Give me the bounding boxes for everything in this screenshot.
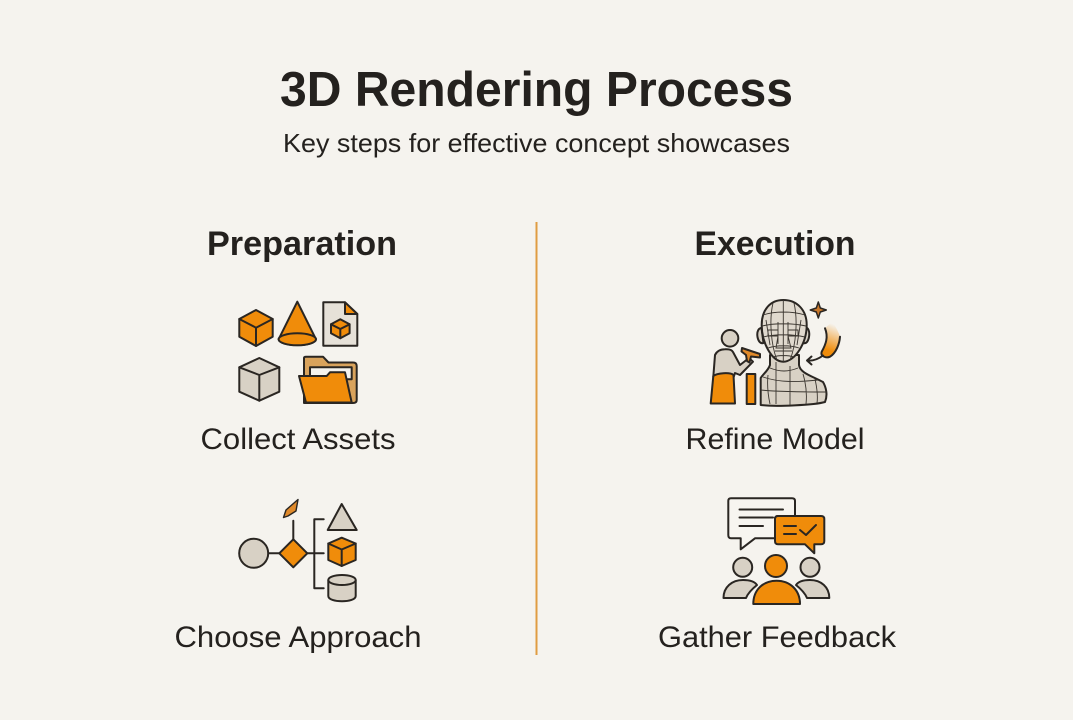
label: Collect Assets: Collect Assets bbox=[200, 423, 396, 456]
center person bbox=[753, 555, 800, 604]
subtitle: Key steps for effective concept showcases bbox=[283, 128, 790, 158]
sparkle bbox=[810, 302, 826, 318]
gray triangle bbox=[328, 504, 357, 530]
orange flame with arrow bbox=[807, 321, 840, 364]
file with cube bbox=[323, 302, 357, 346]
heading: Preparation: Preparation bbox=[207, 225, 397, 263]
orange cone bbox=[279, 302, 316, 345]
right person bbox=[796, 558, 829, 598]
label: Gather Feedback: Gather Feedback bbox=[658, 621, 897, 654]
start circle bbox=[239, 539, 268, 568]
orange block bbox=[747, 374, 755, 404]
icon: choose approach bbox=[239, 500, 357, 601]
gray cylinder bbox=[328, 575, 356, 601]
orange cube bbox=[239, 310, 273, 346]
title: 3D Rendering Process bbox=[280, 63, 793, 117]
label: Choose Approach: Choose Approach bbox=[174, 621, 422, 654]
folder bbox=[299, 357, 357, 403]
sculptor figure bbox=[711, 330, 760, 404]
connector lines bbox=[268, 519, 324, 588]
gray cube bbox=[239, 358, 279, 401]
icon: collect assets bbox=[239, 302, 357, 403]
white speech bubble bbox=[728, 498, 795, 549]
orange speech bubble bbox=[775, 516, 824, 553]
heading: Execution: Execution bbox=[694, 225, 856, 263]
orange cube bbox=[328, 538, 356, 566]
label: Refine Model: Refine Model bbox=[686, 423, 864, 456]
center divider bbox=[536, 222, 538, 655]
left person bbox=[724, 558, 757, 598]
pen nib bbox=[284, 500, 298, 518]
decision diamond bbox=[279, 539, 307, 567]
mesh head bust bbox=[757, 300, 827, 406]
icon: gather feedback bbox=[724, 498, 829, 604]
icon: refine model bbox=[711, 300, 840, 406]
